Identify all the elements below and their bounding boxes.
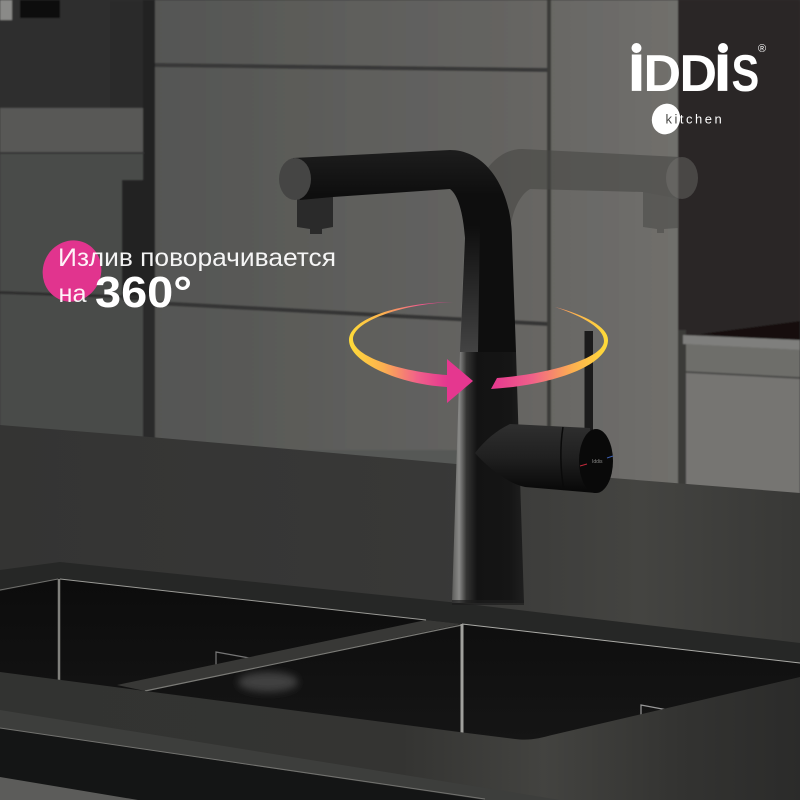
faucet end cap (279, 158, 311, 200)
logo wordmark: i (627, 29, 646, 106)
arrow head (447, 359, 473, 403)
panel: right cabinet front (551, 0, 679, 490)
panel: centre cabinet fronts (155, 0, 551, 450)
logo registered mark: ® (758, 43, 766, 55)
countertop front section (0, 672, 800, 800)
sink rim (0, 562, 800, 664)
ghost end cap (666, 157, 698, 199)
headline word на: на (58, 280, 87, 308)
logo kitchen blob (648, 100, 684, 138)
logo wordmark: D (644, 45, 681, 103)
countertop (0, 425, 800, 800)
basin reflection (238, 672, 298, 692)
neck highlight (460, 225, 480, 352)
faucet rotated ghost position (467, 149, 698, 233)
ring right arc (491, 307, 608, 389)
pink blob accent (33, 231, 111, 311)
drain bracket right (641, 705, 673, 718)
headline line one: Излив поворачивается (58, 244, 336, 272)
kitchen cabinet background (0, 0, 800, 500)
faucet lever handle (584, 331, 593, 431)
IDDIS logo (632, 43, 766, 134)
sink divider (117, 620, 462, 691)
drain bracket left (216, 652, 255, 665)
ghost spout (467, 149, 680, 232)
faucet spout and neck (293, 150, 516, 352)
ring left arc (349, 302, 453, 387)
ghost nozzle (643, 188, 678, 233)
logo wordmark: D (680, 45, 717, 103)
panel: dark wall niche and lower cabinet (678, 0, 800, 500)
rotation arrow ring (349, 302, 608, 403)
panel: left cabinets (0, 0, 155, 440)
logo wordmark (632, 43, 758, 92)
headline 360 degrees: 360° (95, 268, 192, 317)
faucet body (452, 352, 524, 603)
sink basins (0, 579, 800, 742)
faucet lever cylinder (475, 424, 613, 493)
double sink (0, 562, 800, 742)
cap blue mark (607, 456, 613, 458)
logo kitchen label: kitchen (666, 112, 724, 126)
headline text (58, 244, 336, 317)
cap brand text: Iddis (592, 459, 603, 465)
faucet nozzle (297, 190, 333, 234)
lever cap (579, 429, 613, 493)
logo wordmark: S (732, 44, 759, 102)
faucet (279, 150, 613, 605)
logo wordmark: i (713, 29, 732, 106)
cap red mark (580, 464, 587, 466)
